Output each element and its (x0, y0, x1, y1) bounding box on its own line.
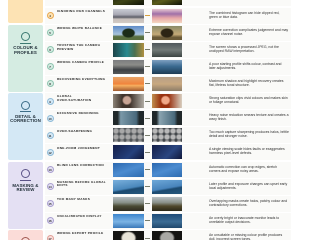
panel: colour and profiles: PROFILES (14, 50, 37, 54)
panel: colour and profiles: COLOUR & (13, 45, 38, 50)
row 8: RECOVERING EVERYTHING (57, 77, 105, 81)
row 11: OVER-SHARPENING (57, 129, 92, 133)
row 4: The combined histogram can hide clipped red, green or blue data. (209, 10, 280, 18)
row 11: 11 (48, 134, 52, 138)
row 5 (45, 25, 291, 41)
row 15: Overlapping masks create halos, patchy colour and contradictory corrections. (209, 199, 287, 207)
row 9: OVER-SATURATION (57, 98, 91, 102)
row 12: 12 (48, 151, 52, 155)
row 4: IGNORING RGB CHANNELS (57, 9, 105, 13)
row 12 (45, 144, 291, 160)
row 8: Maximum shadow and highlight recovery creates flat, lifeless tonal structure. (209, 79, 284, 87)
row 13: BLIND LENS CORRECTION (57, 163, 104, 167)
row 13 (45, 162, 291, 178)
row 8: 8 (49, 82, 51, 86)
row 7: A poor starting profile shifts colour, contrast and later adjustments. (209, 62, 281, 70)
row 15: 15 (48, 202, 52, 206)
panel: detail and correction: DETAIL & (15, 114, 36, 118)
row 6 (45, 42, 291, 58)
row 16: An overly bright or inaccurate monitor leads to unreliable output decisions. (209, 216, 279, 224)
row 11 (45, 127, 291, 143)
row 10: 10 (48, 117, 52, 121)
row 10: EXCESSIVE DENOISING (57, 111, 99, 115)
row 10: Heavy noise reduction smears texture and creates a waxy finish. (209, 113, 288, 121)
panel: masking and review: MASKING & (12, 182, 39, 188)
row 9: 9 (49, 100, 51, 104)
row 5: 5 (49, 31, 51, 35)
row 9 (45, 93, 291, 109)
row 8 (45, 76, 291, 92)
row 9: Strong saturation clips vivid colours and makes skin or foliage unnatural. (209, 96, 288, 104)
row 13: Automatic correction can crop edges, stretch corners and expose noisy areas. (209, 164, 277, 172)
panel: detail and correction (8, 93, 43, 160)
row 15 (45, 196, 291, 212)
row 14: Later profile and exposure changes can upset early local adjustments. (209, 182, 287, 190)
row 14 (45, 179, 291, 195)
row 7: WRONG CAMERA PROFILE (57, 60, 104, 64)
row 17: WRONG EXPORT PROFILE (57, 231, 103, 235)
row 5: WRONG WHITE BALANCE (57, 26, 102, 30)
row 6: TRUSTING THE CAMERA PREVIEW (57, 43, 100, 51)
row 10 (45, 110, 291, 126)
row 13: 13 (48, 168, 52, 172)
row 14: 14 (48, 185, 52, 189)
row 16 (45, 213, 291, 229)
row 9: GLOBAL (57, 94, 72, 98)
row 4: 4 (49, 14, 51, 18)
panel: colour and profiles (8, 25, 43, 92)
panel: detail and correction: CORRECTION (10, 118, 41, 123)
row 6: 6 (49, 48, 51, 52)
row 14: MASKING BEFORE GLOBAL EDITS (57, 180, 106, 187)
row 5: Extreme correction complicates judgement and may expose channel noise. (209, 28, 288, 36)
panel: export section (8, 230, 43, 240)
panel: orange section (8, 0, 43, 23)
row 17 (45, 230, 291, 240)
row 15: TOO MANY MASKS (57, 197, 90, 201)
row 16: 16 (48, 219, 52, 223)
row 6: The screen shows a processed JPEG, not the unclipped RAW interpretation. (209, 45, 279, 53)
row 11: Too much capture sharpening produces halos, brittle detail and stronger noise. (209, 130, 289, 138)
row 3 images (45, 0, 291, 6)
row 16: UNCALIBRATED DISPLAY (57, 214, 102, 218)
row 12: A single viewing scale hides faults or exaggerates harmless pixel-level defects. (209, 147, 285, 155)
row 7: 7 (49, 65, 51, 69)
row 7 (45, 59, 291, 75)
panel: masking and review: REVIEW (16, 187, 35, 192)
panel: masking and review (8, 162, 43, 229)
row 4 (45, 8, 291, 24)
row 12: ONE-ZOOM JUDGEMENT (57, 146, 100, 150)
